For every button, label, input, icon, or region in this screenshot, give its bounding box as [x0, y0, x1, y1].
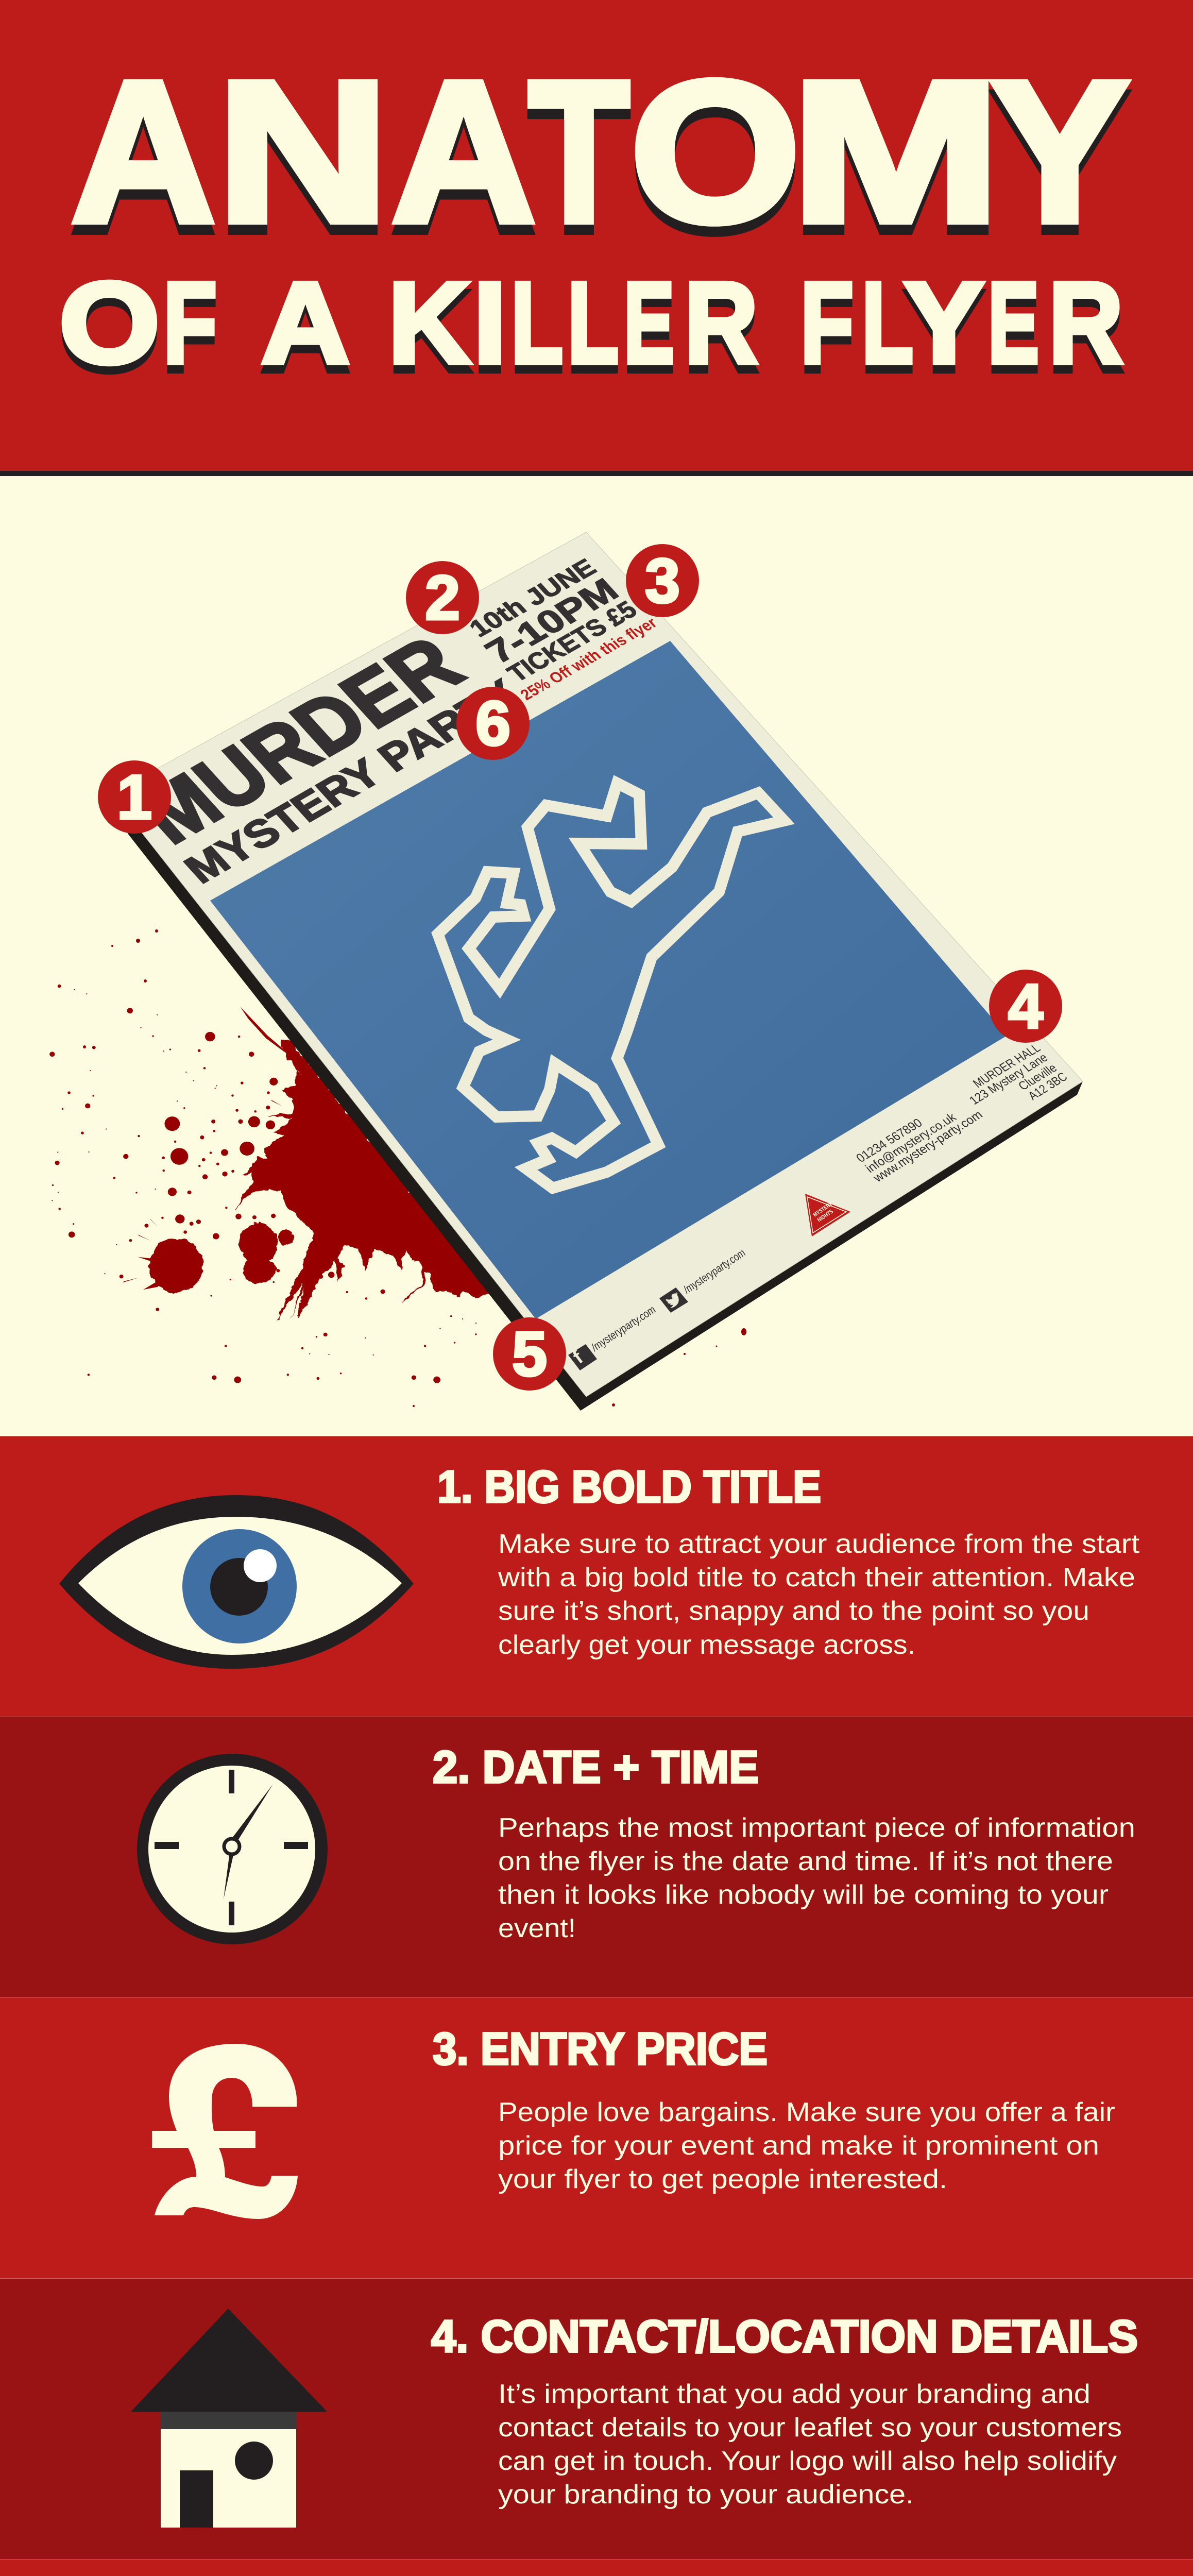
badge 4: 4 [1008, 971, 1043, 1041]
flyer address text: MURDER HALL [970, 1041, 1043, 1091]
badge 2: 2 [425, 563, 460, 633]
body 3: People love bargains. Make sure you offer a fair [498, 2097, 1115, 2127]
subtitle: of a killer flyer: F [800, 259, 854, 387]
badge 2 [406, 561, 479, 634]
subtitle: of a killer flyer: R [685, 259, 758, 387]
badge 3 [626, 544, 699, 617]
flyer twitter link [659, 1247, 748, 1313]
flyer logo triangle [805, 1194, 850, 1236]
subtitle: of a killer flyer: Y [904, 259, 984, 387]
flyer tickets: TICKETS £5 [502, 596, 642, 687]
title: anatomy: N [216, 39, 389, 264]
body 2: event! [498, 1913, 576, 1943]
badge 1: 1 [117, 762, 152, 832]
flyer time: 7-10PM [478, 572, 626, 670]
panel: flyer illustration [0, 476, 1193, 1436]
title: anatomy: A [71, 39, 215, 264]
heading 2: 2. DATE + TIME [433, 1741, 759, 1792]
subtitle: of a killer flyer: F [163, 259, 217, 387]
panel: 4 contact/location details [0, 2278, 1193, 2559]
icon: eye [59, 1495, 414, 1669]
subtitle: of a killer flyer: L [511, 259, 563, 387]
title: anatomy: O [630, 39, 800, 264]
badge 5 [493, 1317, 566, 1391]
subtitle: of a killer flyer: O [59, 259, 160, 387]
body 1: Make sure to attract your audience from the start [498, 1529, 1140, 1559]
subtitle: of a killer flyer: E [624, 259, 674, 387]
body 2: then it looks like nobody will be coming to your [498, 1880, 1109, 1910]
heading 4: 4. CONTACT/LOCATION DETAILS [431, 2311, 1138, 2362]
flyer subtitle: mystery party: MYSTERY PARTY [176, 672, 527, 891]
body 2 [498, 1813, 1135, 1943]
body 1: sure it’s short, snappy and to the point so you [498, 1596, 1089, 1626]
flyer logo triangle: MYSTERY [812, 1201, 834, 1218]
body 1: clearly get your message across. [498, 1630, 915, 1660]
subtitle: of a killer flyer: L [568, 259, 619, 387]
badge 5: 5 [512, 1319, 547, 1389]
title: anatomy: M [791, 39, 1001, 264]
heading 1: 1. BIG BOLD TITLE [437, 1461, 821, 1512]
flyer contact text: info@mystery.co.uk [863, 1110, 959, 1176]
flyer sheet [111, 532, 1083, 1397]
subtitle: of a killer flyer: K [388, 259, 470, 387]
subtitle: of a killer flyer: L [862, 259, 913, 387]
badge 6 [456, 687, 530, 760]
subtitle: of a killer flyer: A [261, 259, 347, 387]
blood splatter [49, 980, 492, 1383]
flyer date: 10th JUNE [464, 554, 602, 642]
flyer facebook link: /mysteryparty.com [588, 1303, 658, 1354]
chalk body outline [438, 783, 784, 1188]
heading 3: 3. ENTRY PRICE [433, 2023, 768, 2074]
icon: pound sign [152, 2044, 298, 2219]
body 2: Perhaps the most important piece of information [498, 1813, 1135, 1843]
subtitle: of a killer flyer: I [473, 259, 506, 387]
body 3: your flyer to get people interested. [498, 2164, 947, 2194]
flyer address text: Clueville [1015, 1061, 1060, 1093]
body 1: with a big bold title to catch their attention. Make [498, 1563, 1135, 1592]
badge 6: 6 [475, 688, 510, 758]
body 3: price for your event and make it prominent on [498, 2131, 1099, 2161]
panel: 3 entry price [0, 1997, 1193, 2278]
title: anatomy: Y [991, 39, 1129, 264]
flyer address text: A12 3BC [1025, 1070, 1070, 1103]
badge 3: 3 [645, 546, 680, 616]
body 3 [498, 2097, 1115, 2194]
body 2: on the flyer is the date and time. If it’s not there [498, 1846, 1113, 1876]
icon: house [131, 2309, 327, 2528]
subtitle: of a killer flyer: E [988, 259, 1039, 387]
body 4: contact details to your leaflet so your customers [498, 2413, 1122, 2443]
body 1 [498, 1529, 1140, 1660]
flyer facebook link: f [569, 1347, 587, 1368]
extra blood droplets near flyer [83, 929, 746, 1407]
badge 4 [989, 970, 1062, 1043]
panel: 5 links to social media [0, 2559, 1193, 2576]
icon: clock [137, 1754, 328, 1944]
flyer image panel [210, 641, 1007, 1319]
flyer title: murder: MURDER [120, 620, 480, 859]
body 4: your branding to your audience. [498, 2480, 914, 2510]
badge 1 [98, 760, 171, 834]
panel: 1 big bold title [0, 1436, 1193, 1717]
body 4: can get in touch. Your logo will also help solidify [498, 2446, 1117, 2476]
flyer contact text: 01234 567890 [854, 1116, 925, 1165]
number badges [98, 544, 1062, 1391]
panel: 2 date + time [0, 1717, 1193, 1997]
title: anatomy: A [391, 39, 536, 264]
title: anatomy: T [529, 39, 629, 264]
panel: header [0, 0, 1193, 476]
flyer twitter link: /mysteryparty.com [680, 1247, 748, 1296]
flyer offer: 25% Off with this flyer [517, 614, 660, 703]
flyer contact text: www.mystery-party.com [870, 1108, 985, 1185]
flyer address text: 123 Mystery Lane [966, 1051, 1051, 1108]
flyer shadow [111, 794, 1083, 1411]
subtitle: of a killer flyer: R [1049, 259, 1123, 387]
flyer logo triangle: NIGHTS [816, 1209, 834, 1223]
body 4 [498, 2379, 1122, 2510]
body 4: It’s important that you add your branding and [498, 2379, 1090, 2409]
flyer facebook link [568, 1303, 658, 1370]
